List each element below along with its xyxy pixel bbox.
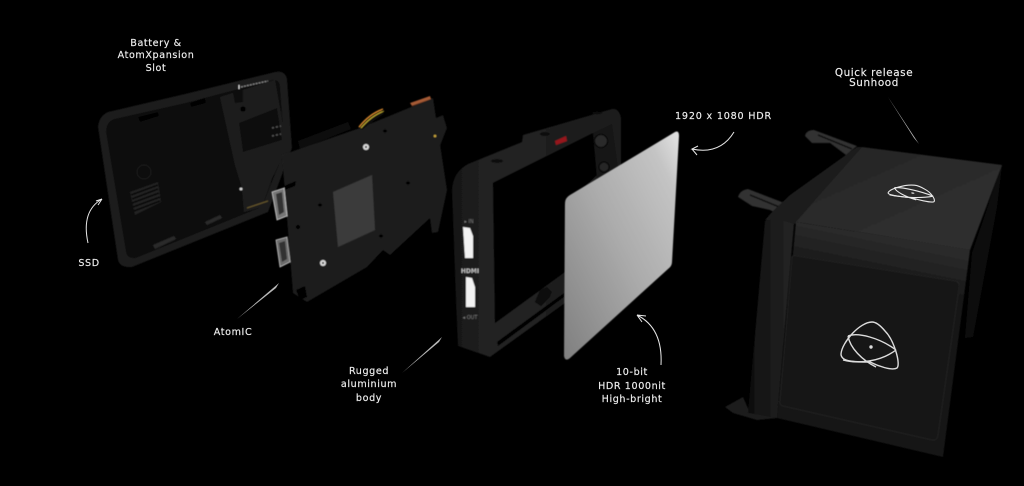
HDMI ports bbox=[463, 227, 473, 258]
arrow: quick release sunhood bbox=[888, 97, 919, 144]
arrow: AtomIC bbox=[237, 283, 279, 319]
main aluminium frame bbox=[452, 109, 621, 357]
HDMI connectors bbox=[272, 188, 287, 220]
Atomos logo on sunhood top bbox=[888, 183, 936, 202]
HDR screen panel bbox=[564, 132, 679, 360]
arrow: rugged aluminium body bbox=[402, 337, 442, 373]
label: SSD: SSD bbox=[78, 258, 100, 269]
arrow: SSD bbox=[86, 199, 102, 243]
main aluminium frame: ▸ IN bbox=[464, 219, 474, 225]
label: 1920 x 1080 HDR: 1920 x 1080 HDR bbox=[675, 111, 772, 122]
label: quick release sunhood: Quick release bbox=[835, 67, 913, 79]
label: 10-bit HDR 1000nit High-bright: HDR 1000nit bbox=[598, 381, 666, 392]
heat spreader chip bbox=[333, 175, 375, 247]
label: 10-bit HDR 1000nit High-bright: High-bright bbox=[602, 394, 662, 405]
main aluminium frame: ◂ OUT bbox=[463, 315, 478, 321]
label: rugged aluminium body: body bbox=[356, 393, 382, 404]
label: rugged aluminium body: Rugged bbox=[349, 366, 389, 377]
AtomIC circuit board bbox=[272, 96, 447, 302]
latch bbox=[535, 287, 552, 306]
arrow: 10-bit HDR bbox=[637, 315, 661, 365]
label: 10-bit HDR 1000nit High-bright: 10-bit bbox=[616, 367, 648, 378]
label: AtomIC: AtomIC bbox=[214, 327, 252, 338]
main aluminium frame: HDMI bbox=[461, 268, 479, 275]
label: battery and AtomXpansion slot: Battery & bbox=[130, 38, 182, 49]
label: battery and AtomXpansion slot: Slot bbox=[146, 63, 166, 74]
red logo bbox=[555, 136, 567, 145]
back case: battery and expansion slot housing bbox=[98, 72, 292, 267]
Atomos logo on sunhood front bbox=[841, 322, 898, 369]
arrow: 1920 x 1080 HDR bbox=[692, 132, 734, 155]
label: battery and AtomXpansion slot: AtomXpansion bbox=[118, 50, 194, 61]
label: rugged aluminium body: aluminium bbox=[341, 379, 397, 390]
sunhood bbox=[725, 130, 1002, 457]
label: quick release sunhood: Sunhood bbox=[849, 77, 899, 89]
